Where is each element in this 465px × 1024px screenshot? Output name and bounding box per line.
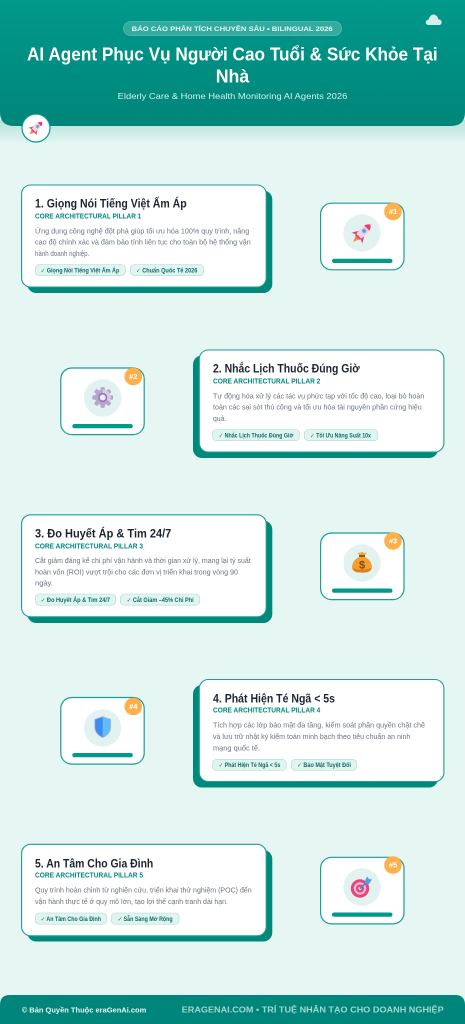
main title: AI Agent Phục Vụ Người Cao Tuổi & Sức Khỏe Tại — [27, 44, 438, 65]
progress bar — [332, 588, 392, 593]
tag: pillar 3 first — [35, 594, 116, 605]
tag: pillar 1 second: ✓ Chuẩn Quốc Tế 2026 — [136, 267, 198, 274]
panel: pillar 2 icon card — [61, 368, 144, 435]
tag: pillar 2 first: ✓ Nhắc Lịch Thuốc Đúng Giờ — [219, 432, 294, 439]
progress bar — [332, 259, 392, 263]
badge: #5: #5 — [389, 861, 397, 870]
subheading: pillar 3: CORE ARCHITECTURAL PILLAR 3 — [35, 543, 143, 550]
main title — [27, 44, 438, 87]
progress bar — [72, 424, 133, 428]
tag: pillar 3 first: ✓ Đo Huyết Áp & Tim 24/7 — [41, 597, 111, 604]
tag: pillar 1 first — [35, 264, 125, 276]
text block: pillar 5 description: Quy trình hoàn chỉnh từ nghiên cứu, triển khai thử nghiệm (POC) đến — [35, 886, 252, 895]
subheading: pillar 4: CORE ARCHITECTURAL PILLAR 4 — [213, 708, 320, 715]
footer copyright: © Bản Quyền Thuộc eraGenAi.com — [22, 1006, 147, 1015]
icon: shield — [95, 717, 111, 738]
footer tagline: ERAGENAI.COM • TRÍ TUỆ NHÂN TẠO CHO DOANH NGHIỆP — [182, 1004, 444, 1015]
text block: pillar 4 description: Tích hợp các lớp bảo mật đa tầng, kiểm soát phân quyền chặt chẽ — [213, 721, 425, 730]
icon: cloud — [426, 14, 442, 25]
heading: pillar 4: 4. Phát Hiện Té Ngã < 5s — [213, 691, 335, 705]
tag: pillar 4 second — [291, 759, 357, 770]
text block: pillar 2 description — [213, 391, 424, 423]
badge: #3: #3 — [389, 537, 397, 546]
badge: #1: #1 — [389, 207, 397, 216]
tag: pillar 5 first: ✓ An Tâm Cho Gia Đình — [41, 917, 101, 923]
heading: pillar 3: 3. Đo Huyết Áp & Tim 24/7 — [35, 526, 172, 541]
text block: pillar 1 description — [35, 226, 251, 258]
progress bar — [332, 912, 392, 917]
heading: pillar 5: 5. An Tâm Cho Gia Đình — [35, 856, 153, 870]
text block: pillar 4 description: và lưu trữ nhật ký kiểm toán minh bạch theo tiêu chuẩn an ninh — [213, 732, 410, 741]
header pill label — [124, 22, 342, 36]
icon: header rocket medallion — [22, 114, 50, 142]
tag: pillar 4 second: ✓ Bảo Mật Tuyệt Đối — [297, 762, 351, 769]
panel: pillar 1 card — [22, 185, 272, 293]
text block: pillar 3 description: ngày. — [35, 579, 53, 588]
tag: pillar 5 second: ✓ Sẵn Sàng Mở Rộng — [118, 916, 173, 923]
panel: pillar 4 card — [193, 680, 444, 788]
text block: pillar 1 description: hành doanh nghiệp. — [35, 249, 89, 258]
icon: money bag: $ — [359, 560, 365, 572]
main title: Nhà — [216, 66, 250, 87]
tag: pillar 3 second: ✓ Cắt Giảm –45% Chi Phí — [127, 597, 194, 604]
heading: pillar 1: 1. Giọng Nói Tiếng Việt Ấm Áp — [35, 196, 187, 211]
text block: pillar 4 description: mạng quốc tế. — [213, 743, 260, 752]
panel: pillar 1 icon card — [321, 203, 404, 270]
panel: pillar 3 card — [22, 515, 272, 623]
panel: pillar 5 card — [22, 844, 272, 942]
tag: pillar 4 first — [212, 759, 286, 770]
progress bar — [72, 753, 133, 757]
text block: pillar 4 description — [213, 721, 425, 752]
tag: pillar 5 first — [35, 913, 107, 924]
header shadow — [0, 120, 465, 144]
text block: pillar 5 description — [35, 886, 252, 906]
text block: pillar 1 description: Ứng dụng công nghệ đột phá giúp tối ưu hóa 100% quy trình, nâng — [35, 226, 249, 235]
text block: pillar 2 description: toàn các sai sót thủ công và tối ưu hóa tài nguyên phần cứng hiệu — [213, 403, 422, 412]
tag: pillar 2 second: ✓ Tối Ưu Năng Suất 10x — [310, 432, 372, 439]
subheading: pillar 1: CORE ARCHITECTURAL PILLAR 1 — [35, 214, 141, 221]
text block: pillar 2 description: Tự động hóa xử lý các tác vụ phức tạp với tốc độ cao, loại bỏ hoàn — [213, 391, 424, 400]
tag: pillar 1 second — [130, 264, 204, 276]
icon: gear — [92, 387, 113, 408]
tag: pillar 4 first: ✓ Phát Hiện Té Ngã < 5s — [219, 763, 281, 769]
text block: pillar 5 description: vận hành thực tế ở quy mô lớn, tạo lợi thế cạnh tranh dài hạn. — [35, 897, 228, 906]
footer band — [0, 995, 465, 1024]
tag: pillar 2 second — [304, 430, 378, 441]
panel: pillar 2 card — [193, 350, 444, 458]
panel: pillar 5 icon card — [321, 856, 404, 924]
tag: pillar 3 second — [120, 594, 200, 605]
text block: pillar 3 description: Cắt giảm đáng kể chi phí vận hành và thời gian xử lý, mang lại tỷ suất — [35, 556, 252, 565]
panel: pillar 4 icon card — [61, 698, 144, 764]
text block: pillar 3 description — [35, 556, 252, 588]
icon: rocket — [348, 219, 376, 247]
tag: pillar 5 second — [111, 913, 179, 924]
tag: pillar 2 first — [212, 430, 300, 441]
header banner — [0, 0, 465, 126]
heading: pillar 2: 2. Nhắc Lịch Thuốc Đúng Giờ — [213, 361, 360, 376]
panel: pillar 3 icon card — [321, 532, 404, 600]
badge: #2: #2 — [129, 372, 137, 381]
badge: #4: #4 — [129, 702, 138, 711]
subtitle: Elderly Care & Home Health Monitoring AI Agents 2026 — [118, 91, 348, 101]
text block: pillar 3 description: hoàn vốn (ROI) vượt trội cho các đơn vị triển khai trong vòng 90 — [35, 567, 238, 576]
header pill label: BÁO CÁO PHÂN TÍCH CHUYÊN SÂU • BILINGUAL 2026 — [132, 24, 333, 33]
text block: pillar 2 description: quả. — [213, 414, 226, 423]
icon: target with arrow — [351, 876, 372, 898]
subheading: pillar 2: CORE ARCHITECTURAL PILLAR 2 — [213, 379, 320, 386]
tag: pillar 1 first: ✓ Giọng Nói Tiếng Việt Ấm Áp — [41, 267, 120, 274]
subheading: pillar 5: CORE ARCHITECTURAL PILLAR 5 — [35, 873, 143, 880]
text block: pillar 1 description: cao độ chính xác và đảm bảo tính liên tục cho toàn bộ hệ thống vận — [35, 238, 251, 247]
